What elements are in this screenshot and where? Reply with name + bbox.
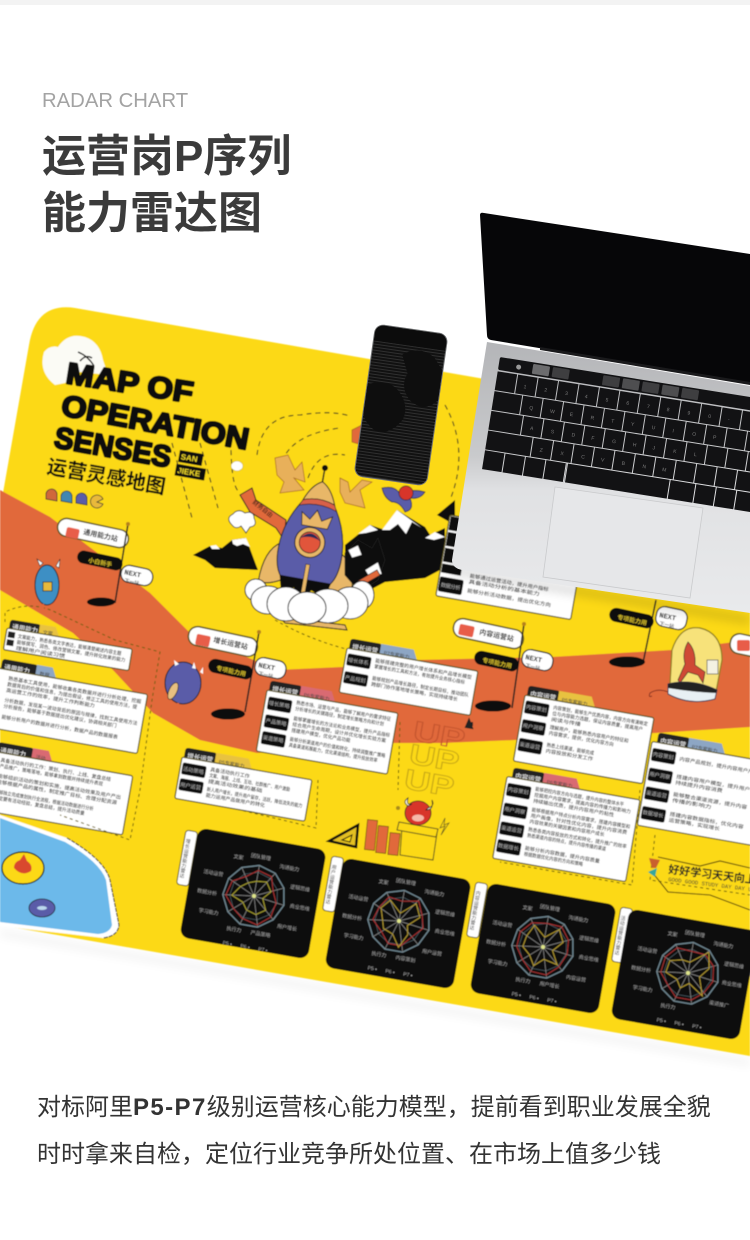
flag 1: 通用能力站: 小白新手 [88,556,113,569]
key labels [514,384,730,482]
panel: 内容运营 P7: 渠道运营 [645,788,668,800]
laptop hinge [540,347,750,385]
flag 3: 内容运营站: 下一站 [525,662,541,672]
panel: 通用能力 文案: 能够撰写、润色、修改营销文案，提升转化效果的能力 [16,639,126,664]
panel: 内容运营 P7: 数据增长 [642,808,665,820]
panel: 增长运营 P6: 结合用户生命周期，设计并优化增长实验方案 [292,721,387,744]
radar chart: 数据分析 [485,938,506,948]
mat background [0,307,750,1056]
radar chart: 沟通能力 [424,888,445,898]
title: 运营岗P序列 [42,132,291,181]
flag 3: 内容运营站 [452,617,555,712]
up up up lettering: UP [411,715,468,755]
radar chart: 逻辑思维 [724,960,744,971]
flag 1: 通用能力站: 通用能力站 [83,527,119,543]
right edge pill [728,632,750,660]
panel: 内容运营 P6: 能够把控内容方向与选题，提升内容的整体水平 [535,786,625,808]
radar chart: 沟通能力 [713,940,734,950]
panel: 内容运营 P7: 搭建内容数据指标，优化内容 [669,811,744,831]
panel: 增长运营 P5: 具备活动执行工作 [210,766,250,780]
panel: 增长运营 P6: 分析增长的关键路径，制定增长策略方向和计划 [295,705,384,728]
panel: 通用能力 文案: 通用能力 [12,622,39,635]
flag 1: 通用能力站: 下一站 [124,577,140,587]
rocket antenna [323,471,324,482]
panel: 通用能力 数据: 熟悉基本工具使用，能够收集各类数据并进行分析处理，挖掘 [8,675,142,705]
volcano steam [229,511,255,533]
radar chart: 活动运营 [637,945,658,955]
radar chart: P6 ▪ [674,1020,684,1028]
lake [0,815,119,938]
panel: 内容运营 P5: 阅读与传播 [551,716,581,728]
radar chart: 文案 [667,930,678,939]
panel: 增长运营 P6: 渠道策略 [262,733,285,745]
radar chart: P6 ▪ [385,968,395,976]
chinese map title: 运营灵感地图 [45,455,167,499]
panel: 通用能力 活动 [0,741,135,835]
red marker [466,720,472,728]
panel: 通用能力 数据: 能够分析用户的数据并进行分析，数据产品的数据报表 [1,713,118,741]
side tab: 增长运营能力雷达 [178,837,191,880]
purple donut [29,899,55,917]
flag 4: 专项能力用 [617,613,648,627]
radar chart: 逻辑思维 [290,883,310,894]
panel: 内容运营 P7: 运营策略，实现增长 [668,817,720,833]
radar chart: 活动运营 [348,893,369,903]
bottom caption [37,1094,711,1168]
panel: 增长运营 P6: 增长策略 [268,699,291,710]
panel: 内容运营 P7: 用户洞察 [649,770,671,781]
bottom caption: 时时拿来自检，定位行业竞争所处位置、在市场上值多少钱 [37,1141,661,1168]
radar chart: 执行力 [515,976,531,985]
panel: 内容运营 P7 [637,732,750,848]
radar card 2 [322,856,472,989]
radar chart [333,869,463,985]
panel: 增长运营 P6: 能够掌握增长的方法论和业务模型，提升产品指标 [293,715,391,739]
laptop [450,213,750,624]
panel: 内容运营 P5: 内容策划，能够生产优质内容，内容方向有清晰定 [553,704,648,728]
eyebrow: RADAR CHART: RADAR CHART [42,90,188,112]
panel: 增长运营 P7: 产品规划 [344,673,366,685]
panel: 内容运营 P6: 内容策划 [507,785,529,796]
radar chart: P7 ▪ [403,972,413,979]
desk mat map [0,307,750,1056]
panel: 通用能力 数据: 数据 [39,670,50,679]
panel: 内容运营 P7: 搭建内容用户模型，提升用户 [676,773,750,793]
radar chart: 用户运营 [422,948,442,958]
panel: 内容运营 P6: P6专家能力 [546,779,573,790]
laptop screen [480,213,750,383]
san jieke tag: SAN [180,452,198,464]
side tab: 内容运营能力雷达 [468,889,481,932]
panel: 通用能力 文案: 文案 [42,629,53,638]
flag 3: 内容运营站: NEXT [524,654,542,665]
radar chart: P6 ▪ [529,994,539,1002]
radar chart [622,921,750,1037]
panel: 内容运营 P5 [513,685,656,784]
orange bars [364,820,400,855]
panel: 内容运营 P6: 用户画像，针对性优化内容，提升内容消费 [530,812,628,836]
radar chart: 逻辑思维 [579,934,599,945]
panel: 增长运营 P5: 增长运营 [187,751,214,764]
panel: 内容运营 P5: 熟悉上线渠道，能够完成 [546,742,595,757]
panel: 内容运营 P6: 渠道运营 [500,823,523,835]
panel: 增长运营 P7 [339,638,480,715]
panel: behind laptop: 能够分析活动数据，提出优化方向 [467,587,551,609]
panel: 内容运营 P5: 理解用户，能够熟悉内容用户的特征和 [549,724,629,745]
key labels: QWERTYUIOP [529,405,717,441]
panel: 增长运营 P6: 能够分析渠道用户的价值和转化，持续调整推广策略 [289,736,386,759]
phone top band [374,325,447,351]
radar chart: P5 ▪ [511,991,522,999]
mat shadow [0,930,750,1066]
radar chart: 团队管理 [395,877,416,887]
panel: behind laptop: 能够通过运营活动，提升用户指标 [469,572,549,593]
up up up lettering: UP [407,738,462,778]
panel: 增长运营 P7: 增长体系 [347,655,369,667]
radar card 1 [176,828,327,960]
monster: blue [35,559,60,609]
radar chart: 沟通能力 [279,863,300,873]
radar chart: 产品策略 [250,929,271,939]
key rows [484,381,750,504]
panel: 内容运营 P5: 位与内容能力选题，保证内容质量，提高用户 [552,710,643,733]
radar card 3 [466,882,617,1014]
panel: 增长运营 P7: 能够搭建完整的用户增长体系和产品增长模型 [375,657,472,681]
panel: 内容运营 P7: 内容产品规划，提升内容用户产 [679,756,750,775]
flag 4 [608,600,689,668]
radar chart: 学习能力 [198,907,219,917]
panel: 内容运营 P6: 内容运营 [515,771,542,784]
radar chart: 活动运营 [492,919,513,929]
panel: 增长运营 P5: 新人用户增长，提升用户留存，活跃，降低流失的能力 [206,786,303,810]
left volcano [193,538,258,570]
side tab [176,830,198,886]
rocket body [273,497,350,587]
laptop shadow [450,566,750,624]
up up up lettering: UP [402,763,457,803]
radar chart: P7 ▪ [258,947,268,954]
panel: 通用能力 文案: 理解用户阅读习惯 [15,645,66,660]
panel: 增长运营 P5: P5专家能力 [218,759,245,770]
radar chart: 执行力 [660,1002,676,1011]
rocket nose [303,479,338,505]
radar chart: 内容运营 [566,974,586,984]
monster: purple [165,660,203,714]
panel: 内容运营 P6: 用户洞察 [504,805,526,816]
white clouds [245,579,374,630]
radar chart [477,895,607,1011]
radar chart: P5 ▪ [222,940,233,948]
swim ring with red creature [2,852,44,884]
map title: OPERATION [59,389,252,457]
red ball creature [382,486,425,512]
panel: 增长运营 P6: 熟悉市场、运营与产品，能够了解用户的需求特征 [296,699,391,723]
small creature pile [345,538,385,592]
radar chart: P7 ▪ [547,998,557,1005]
panel: 通用能力 数据: 数据背后的价值和信息，为提出假设，修正工具的使用方法，提 [7,681,138,711]
flag 2: 增长运营站: NEXT [257,662,275,673]
panel: 内容运营 P6: 能够分析内容数据，提升内容质量 [524,845,600,865]
panel: 增长运营 P7: 掌握增长的工具和方法，有效提升业务核心指标 [374,663,465,686]
panel: 内容运营 P6: 持续输出优质，提升内容用户的粘性 [533,797,615,819]
panel: 内容运营 P5: 用户洞察 [522,721,544,733]
title: 能力雷达图 [42,189,262,238]
radar chart: 商业思维 [721,979,742,989]
panel: 增长运营 P6: 增长运营 [272,684,299,697]
radar chart: P7 ▪ [692,1024,702,1031]
panel: 增长运营 P5: 提高活动效果的基础 [208,778,263,794]
panel: 通用能力 数据: 分析数据，发现某一波动背后的原因与规律，找到工具使用方法 [4,697,138,727]
flag 3: 内容运营站: 内容运营站 [479,627,515,643]
key labels: ZXCVBNM [539,447,667,474]
panel: 内容运营 P7: 持续提升内容消费 [675,779,723,794]
radar chart: 活动运营 [203,868,224,878]
triangle ruler [329,825,358,847]
flag 2: 增长运营站: 专项能力用 [216,664,247,678]
panel: 内容运营 P6 [493,767,642,882]
panel: 增长运营 P7: P7专家能力 [383,650,410,661]
radar chart: 学习能力 [343,932,364,942]
ghost icons [46,489,103,508]
panel: behind laptop: 数据分析 [440,581,461,592]
radar chart: 执行力 [226,925,242,934]
panel: 增长运营 P5: 文案、海报、上线、互动、社群推广、用户激励 [209,772,291,793]
panel: 内容运营 P5: 渠道运营 [519,740,541,751]
map title: SENSES [52,421,174,474]
panel: 增长运营 P5 [175,747,314,821]
lightning right [340,425,372,508]
laptop base [452,342,750,613]
right mountains [345,500,455,590]
panel: 内容运营 P5: P5专家能力 [561,697,588,708]
panel: 内容运营 P7: 内容策划 [652,750,674,761]
rocket fins [258,540,358,598]
top grey strip [0,0,750,5]
panel: 增长运营 P7: 能够规划产品增长路径，制定长期目标，推动团队 [372,675,469,699]
radar chart: P6 ▪ [240,943,250,951]
key labels: 1234567890- [523,384,730,423]
phone body [353,324,449,486]
radar chart: 商业思维 [578,953,599,964]
touch bar [498,357,750,413]
side tab [611,907,633,963]
radar chart [188,844,318,960]
map title: MAP OF [64,357,195,410]
flag 4: NEXT [658,612,676,623]
panel: 增长运营 P5: 活动策略 [182,764,205,776]
radar chart: 学习能力 [632,984,653,994]
phone [353,324,449,486]
panel: 内容运营 P6: 根据数据优化内容的方向和策略 [523,851,584,868]
radar chart: 数据分析 [196,887,217,897]
panel: behind laptop: 具备活动分析的基本能力 [468,578,540,598]
orange road band [0,490,750,753]
panel: 通用能力 活动: 产品推广，策略落地，能够拿到数据并持续提升表现 [0,763,104,788]
flag 2: 增长运营站: 增长运营站 [213,635,249,651]
radar chart: 文案 [522,904,533,913]
slogan ribbon [648,857,750,910]
phone numeral 3 counters [395,348,445,409]
bottom caption: 对标阿里P5-P7级别运营核心能力模型，提前看到职业发展全貌 [37,1094,711,1121]
panel: 通用能力 文案 [3,619,134,671]
radar chart: 数据分析 [630,964,651,974]
panel: 增长运营 P6: P6专家能力 [303,692,330,703]
panel: 增长运营 P6: 具备渠道拓展能力，优化渠道结构，提升投放效率 [288,742,378,764]
radar chart: 用户增长 [277,923,297,933]
panel: 增长运营 P7: 增长运营 [352,642,379,655]
red banner [240,488,286,540]
panel: 内容运营 P5: 内容需求，提供，优化内容方向 [548,730,614,748]
flag 2: 增长运营站 [187,625,288,720]
cloud with bird [42,336,108,385]
lightning left [275,455,305,493]
radar chart: 数据分析 [341,912,362,922]
radar card 4 [610,907,750,1040]
panel: 内容运营 P7: 传播的影响力 [672,797,712,811]
panel: 增长运营 P6: 搭建用户模型，优化产品功能 [291,727,351,744]
flag 1: 通用能力站 [56,517,154,606]
flag 4: 下一站 [659,620,675,630]
panel: 内容运营 P6: 能够根据用户特点分析内容需求，搭建内容模型和 [531,806,631,831]
panel: 通用能力 数据: 分析报告，能够基于数据提出优化建议，协调相关部门 [3,703,117,729]
radar chart: P5 ▪ [367,965,378,973]
panel: 内容运营 P6: 内容效果的关键因素和内容用户成长 [529,818,605,838]
panel: 通用能力 文案: 文案能力，熟悉各类文字表达，能够清楚阐述内容主题 [17,633,122,657]
panel: 增长运营 P7: 跨部门协作落地增长策略，实现持续增长 [370,681,458,703]
title [42,132,291,238]
radar chart: 文案 [378,878,389,887]
small white comet [231,461,243,471]
panel: behind laptop [436,515,585,620]
side tab [466,882,488,938]
panel: 增长运营 P5: 能力运用产品做用户的转化 [205,792,265,809]
panel: 通用能力 活动: 活动 [35,754,46,762]
radar chart: 商业思维 [434,927,455,938]
panel: 内容运营 P6: 数据增长 [497,841,520,853]
san jieke tag: JIEKE [177,466,202,479]
radar chart: 用户增长 [539,980,560,990]
panel: 通用能力 数据 [0,657,149,754]
keyboard [484,357,750,504]
radar chart: 商业思维 [289,902,310,913]
up up up lettering [402,715,468,803]
panel: 增长运营 P6 [256,680,400,774]
panel: 通用能力 活动: 通用能力 [0,745,27,759]
panel: 内容运营 P7: 内容运营 [660,736,687,749]
side tab: 用户运营能力雷达 [324,864,337,906]
panel: 内容运营 P6: 熟悉各类内容投放的方式和转化，提升推广的效率 [528,826,627,850]
panel: 内容运营 P5: 内容运营 [530,689,557,702]
panel: 增长运营 P6: 产品策略 [265,716,288,728]
san jieke tag [175,450,209,481]
panel: 内容运营 P7: P7专家能力 [691,744,718,755]
bull on podium [396,798,449,860]
panel: 通用能力 活动: 具备活动执行的工作：策划、执行、上线、复盘总结 [0,757,111,783]
radar chart: 团队管理 [250,852,271,862]
panel: 内容运营 P5: 内容策划 [525,702,547,714]
flag 2: 增长运营站: 下一站 [258,670,274,680]
radar chart: 文案 [233,853,244,862]
panel: 通用能力 数据: 通用能力 [3,662,31,676]
rocket base flame [276,575,331,603]
dashed connector lines [5,606,750,895]
radar chart: 学习能力 [487,958,508,968]
radar chart: 逻辑思维 [435,908,455,919]
dome with creature [649,628,722,702]
key labels: ASDFGHJKL [530,426,697,458]
side tab: 活动运营能力雷达 [613,914,626,957]
radar chart: 执行力 [371,950,387,959]
rocket crown [300,508,333,530]
radar chart: 内容策划 [395,954,416,964]
red banner: 财务自由 [251,498,275,519]
radar chart: 渠道推广 [709,999,729,1010]
panel: 内容运营 P6: 熟悉渠道内容的特点，提升内容传播的渠道 [527,832,607,853]
panel: 内容运营 P5: 内容投放和分发工作 [545,747,593,763]
side tab [322,856,344,912]
radar chart: 团队管理 [684,929,705,939]
trackpad [543,487,703,598]
radar chart: P5 ▪ [656,1017,667,1025]
rocket [257,457,373,607]
flag 3: 内容运营站: 专项能力用 [482,656,513,670]
dashed orbit lines [172,405,459,650]
radar chart: 团队管理 [539,903,560,913]
rocket porthole [292,525,327,560]
flag 1: 通用能力站: NEXT [123,569,141,580]
panel: 内容运营 P6: 挖掘用户内容需求，提高内容的传播力和影响力 [534,792,631,815]
panel: 增长运营 P5: 用户运营 [180,780,202,792]
panel: 通用能力 数据: 高运营工作的效率，提升工作判断能力 [6,687,95,709]
map title [52,357,252,474]
panel: 内容运营 P7: 能够整合渠道资源，提升内容 [673,791,748,811]
panel: 通用能力 活动: 能够组织活动的策划和实施，提高活动效果及用户产出 [0,772,121,801]
radar chart: 沟通能力 [568,914,589,924]
